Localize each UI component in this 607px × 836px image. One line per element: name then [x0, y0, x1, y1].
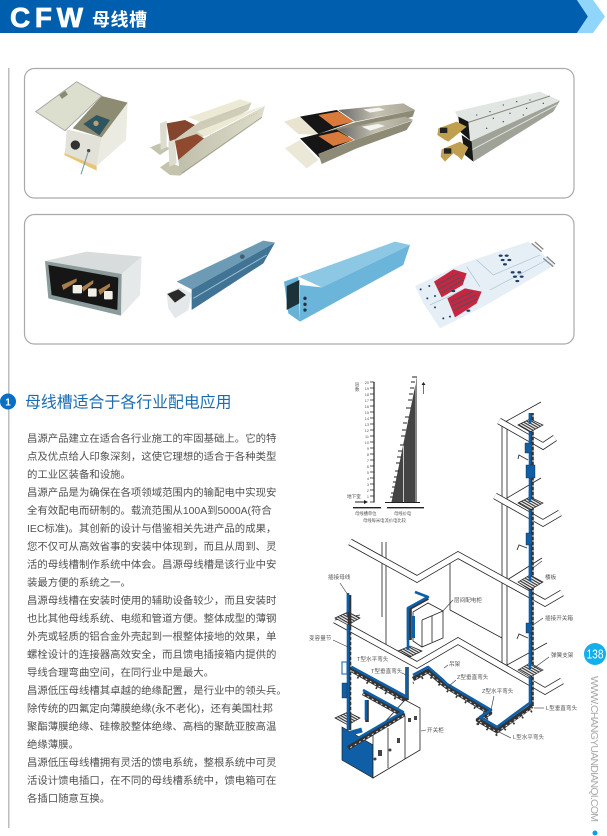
floor ruler: 9 — [367, 447, 369, 451]
label: floor distribution cabinet: 层间配电柜 — [454, 596, 482, 604]
body text: 您不仅可从高效省事的安装中体现到，而且从周到、灵 — [27, 540, 277, 553]
label: capacity section: 变容量节 — [309, 634, 332, 642]
re-drawn bus over plates — [348, 413, 530, 669]
floor ruler: 10 — [365, 441, 369, 445]
floor support plates — [335, 419, 543, 725]
diagram labels — [309, 561, 577, 741]
header chevron — [577, 0, 607, 33]
body text: 昌源产品建立在适合各行业施工的牢固基础上。它的特 — [27, 432, 276, 445]
floor ruler: 17 — [365, 399, 369, 403]
label: L horizontal bend — [497, 731, 544, 741]
basement label and arrow: 地下室 — [347, 493, 361, 500]
body text: 活设计馈电插口，在不同的母线槽系统中，馈电箱可在 — [27, 774, 276, 787]
body text: IEC标准)。其创新的设计与借鉴相关先进产品的成果， — [27, 522, 276, 535]
label: Z vertical bend: Z型垂直弯头 — [457, 673, 489, 681]
label: L horizontal bend: L型水平弯头 — [513, 733, 544, 741]
section heading: 母线槽适合于各行业配电应用 — [25, 392, 232, 412]
product: dotted white busbar pair — [437, 92, 560, 162]
floor ruler: 4 — [367, 477, 369, 481]
chart captions: 母线价电 — [394, 510, 412, 517]
label: T vertical bend: T型垂直弯头 — [371, 667, 403, 675]
label: floor distribution cabinet — [442, 596, 482, 612]
floor ruler: 18 — [365, 393, 369, 397]
floor ruler: 16 — [365, 405, 369, 409]
upward arrow — [422, 382, 426, 394]
basement label and arrow — [347, 493, 368, 504]
body text: 除传统的四氟定向薄膜绝缘(永不老化)，还有美国杜邦 — [27, 702, 273, 715]
blue dot — [592, 830, 598, 836]
body text: 外壳或轻质的铝合金外壳起到一根整体接地的效果，单 — [27, 630, 276, 643]
label: Z vertical bend — [449, 673, 489, 686]
body text: 各插口随意互换。 — [27, 792, 110, 805]
floor ruler: 11 — [365, 435, 369, 439]
body text: 装最方便的系统之一。 — [27, 576, 131, 589]
label: plug-in busbar — [328, 573, 351, 595]
floor ruler: 13 — [365, 423, 369, 427]
building columns — [382, 402, 547, 666]
diagram: building riser layout — [309, 402, 577, 778]
chart: floors versus busbar cost — [347, 377, 426, 524]
label: T horizontal bend: T型水平弯头 — [357, 655, 389, 663]
header title Chinese: 母线槽 — [92, 10, 147, 30]
floor ruler — [365, 381, 374, 502]
left riser busbar — [342, 593, 351, 730]
body text: 昌源低压母线槽其卓越的绝缘配置，是行业中的领头兵。 — [27, 684, 287, 697]
label: Z horizontal bend: Z型水平弯头 — [482, 687, 514, 695]
chart captions: 母线每米电流价电比较 — [363, 517, 407, 524]
label: plug-in busbar: 插接母线 — [328, 573, 351, 581]
floor ruler: 7 — [367, 459, 369, 463]
chart captions: 母线槽单位 — [355, 510, 377, 517]
body text: 昌源低压母线槽拥有灵活的馈电系统，整根系统中可灵 — [27, 756, 277, 769]
floor ruler: 20 — [365, 381, 369, 385]
floor ruler: 5 — [367, 471, 369, 475]
panel: bottom product photos — [24, 214, 574, 344]
floor ruler: 12 — [365, 429, 369, 433]
chart captions — [355, 510, 412, 524]
axis label floors: 层 — [355, 382, 360, 388]
axis label floors: 数 — [355, 386, 360, 393]
floor ruler: 3 — [367, 483, 369, 487]
label: Z horizontal bend — [482, 687, 514, 710]
body text: 也比其他母线系统、电缆和管道方便。整体成型的薄钢 — [27, 612, 276, 625]
body text: 导线合理弯曲空间，在同行业中是最大。 — [27, 666, 214, 679]
baselines — [353, 507, 424, 508]
horizontal busbar run — [348, 665, 532, 735]
page number badge — [584, 643, 606, 665]
website text: WWW.CHANGYUANDIANQI.COM — [588, 676, 600, 822]
body text: 昌源产品是为确保在各项领域范围内的输配电中实现安 — [27, 486, 276, 499]
label: T vertical bend — [371, 667, 406, 675]
body text: 活的母线槽制作系统中体会。昌源母线槽是该行业中安 — [27, 558, 276, 571]
label: spring bracket — [534, 651, 574, 668]
label: L vertical bend — [534, 704, 577, 712]
floor ruler: 8 — [367, 453, 369, 457]
label: capacity section — [309, 634, 348, 647]
floor slabs — [335, 421, 562, 691]
product: flange end box with insulators — [45, 252, 142, 316]
right riser busbar — [517, 413, 535, 706]
body text — [27, 432, 287, 805]
body text: 全有效配电而研制的。载流范围从100A到5000A(符合 — [27, 504, 272, 517]
product: silver busbar pair with orange insulation — [284, 103, 415, 168]
header banner — [0, 0, 607, 33]
product: white plates with red fins — [415, 242, 555, 328]
label: spring bracket: 弹簧支架 — [551, 651, 574, 659]
body text: 聚酯薄膜绝缘、硅橡胶整体绝缘、高档的聚酰亚胺高温 — [27, 720, 276, 733]
floor ruler: 1 — [367, 495, 369, 499]
floor distribution cabinet — [408, 592, 443, 647]
label: plug-in switch box: 插接开关箱 — [545, 614, 573, 622]
body text: 的工业区装备和设施。 — [27, 468, 131, 481]
body text: 螺栓设计的连接器高效安全，而且馈电插接箱内提供的 — [27, 648, 276, 661]
panel: top product photos — [24, 68, 574, 198]
label: floor slab: 楼板 — [545, 573, 557, 581]
floor ruler: 6 — [367, 465, 369, 469]
product: light blue busbar — [284, 242, 410, 322]
floor ruler: 15 — [365, 411, 369, 415]
body text: 绝缘薄膜。 — [27, 738, 79, 751]
label: floor slab — [533, 561, 557, 581]
product: copper busbar pair — [150, 99, 265, 176]
section number badge — [0, 394, 16, 410]
product: open junction box — [36, 82, 128, 174]
section number badge: 1 — [5, 398, 11, 408]
label: switch cabinet — [421, 726, 444, 734]
floor ruler: 14 — [365, 417, 369, 421]
axis label floors — [355, 382, 360, 393]
cost wedge — [385, 377, 420, 502]
left margin rule — [8, 68, 10, 828]
label: hanger — [444, 661, 461, 668]
header title CFW: CFW — [10, 2, 84, 33]
switchgear cabinet — [342, 690, 420, 778]
label: L vertical bend: L型垂直弯头 — [546, 704, 577, 712]
label: hanger: 吊架 — [449, 661, 461, 668]
body text: 点及优点给人印象深刻，这使它理想的适合于各种类型 — [27, 450, 276, 463]
label: switch cabinet: 开关柜 — [427, 726, 444, 734]
label: plug-in switch box — [533, 614, 573, 625]
floor ruler: 2 — [367, 489, 369, 493]
product: blue-grey feeder busbar — [167, 241, 275, 318]
body text: 昌源母线槽在安装时使用的辅助设备较少，而且安装时 — [27, 594, 276, 607]
floor ruler: 19 — [365, 387, 369, 391]
